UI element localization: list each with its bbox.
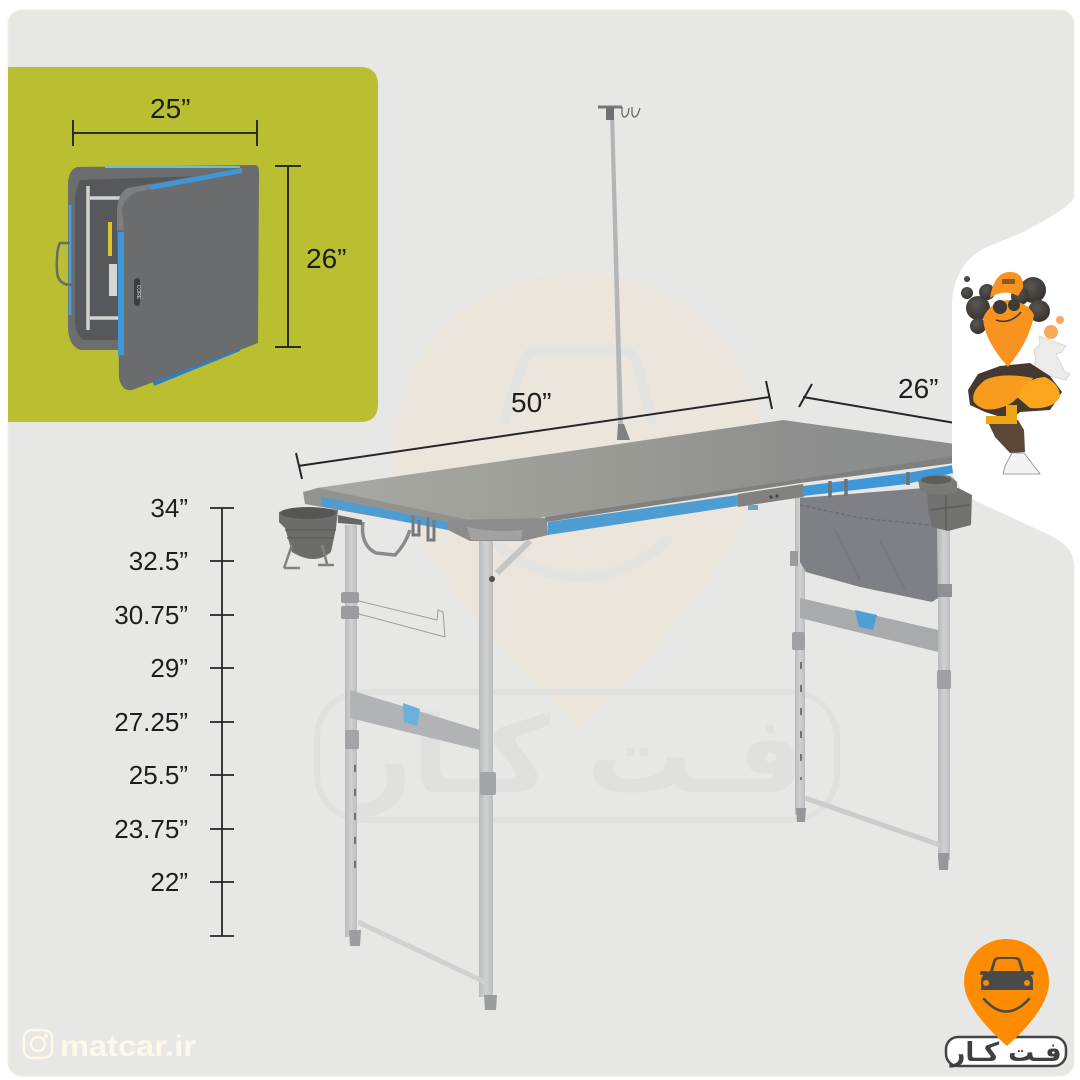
storage bag bbox=[800, 487, 938, 602]
mascot body bbox=[968, 363, 1062, 420]
dimension: 26 inch depth: 26” bbox=[898, 373, 938, 404]
icon: smile bbox=[984, 999, 1029, 1012]
panel: folded size bbox=[8, 67, 378, 422]
mascot hair bbox=[961, 276, 1050, 334]
mascot belt bbox=[986, 405, 1017, 424]
mascot tools bbox=[1030, 336, 1070, 384]
mascot head bbox=[983, 300, 1034, 367]
table frame corner bbox=[448, 518, 548, 541]
instagram handle: matcar.ir bbox=[60, 1030, 196, 1063]
folded table bbox=[57, 165, 259, 390]
height scale: 34” bbox=[150, 493, 188, 523]
table legs back bbox=[790, 495, 952, 870]
wire hanger bbox=[359, 601, 445, 637]
height scale: 32.5” bbox=[129, 546, 188, 576]
height scale: 27.25” bbox=[114, 707, 188, 737]
icon: car bbox=[980, 957, 1034, 990]
logo bbox=[946, 939, 1066, 1068]
logo name box: فـت کـار bbox=[948, 1038, 1062, 1068]
dimension: 25 inch: 25” bbox=[150, 93, 190, 124]
white notch bbox=[952, 188, 1080, 565]
right cup holder bbox=[918, 475, 972, 531]
mascot legs bbox=[986, 418, 1025, 453]
hooks and strap bbox=[363, 515, 434, 555]
watermark: brand box: فـت کـار bbox=[346, 694, 805, 818]
center hinge bbox=[738, 484, 803, 510]
mascot boots bbox=[1003, 453, 1040, 474]
logo pin bbox=[964, 939, 1049, 1046]
table frame left bbox=[303, 488, 470, 533]
height scale bbox=[114, 493, 234, 936]
dimension: 26 inch depth bbox=[799, 373, 955, 423]
product: unfolded table bbox=[279, 107, 955, 1010]
dimension: 26 inch bbox=[275, 166, 346, 347]
icon: instagram bbox=[24, 1030, 52, 1058]
blue rails bbox=[322, 465, 953, 535]
mascot bbox=[961, 272, 1070, 474]
pole with hook bbox=[598, 107, 640, 440]
height scale: 30.75” bbox=[114, 600, 188, 630]
mascot arms bbox=[973, 375, 1033, 410]
height scale: 29” bbox=[150, 653, 188, 683]
table legs front bbox=[341, 525, 530, 1010]
height scale: 23.75” bbox=[114, 814, 188, 844]
height scale: 25.5” bbox=[129, 760, 188, 790]
dimension: 50 inch bbox=[296, 381, 772, 479]
dimension: 26 inch: 26” bbox=[306, 243, 346, 274]
folded table: CORE bbox=[135, 285, 141, 300]
table top bbox=[312, 420, 955, 524]
left cup holder bbox=[279, 507, 362, 568]
watermark: logo pin bbox=[393, 272, 762, 728]
dimension: 50 inch: 50” bbox=[511, 387, 551, 418]
mascot cap bbox=[990, 272, 1023, 298]
rail straps bbox=[830, 472, 908, 498]
mascot bubbles bbox=[1044, 316, 1064, 339]
height scale: 22” bbox=[150, 867, 188, 897]
dimension: 25 inch bbox=[73, 93, 257, 146]
